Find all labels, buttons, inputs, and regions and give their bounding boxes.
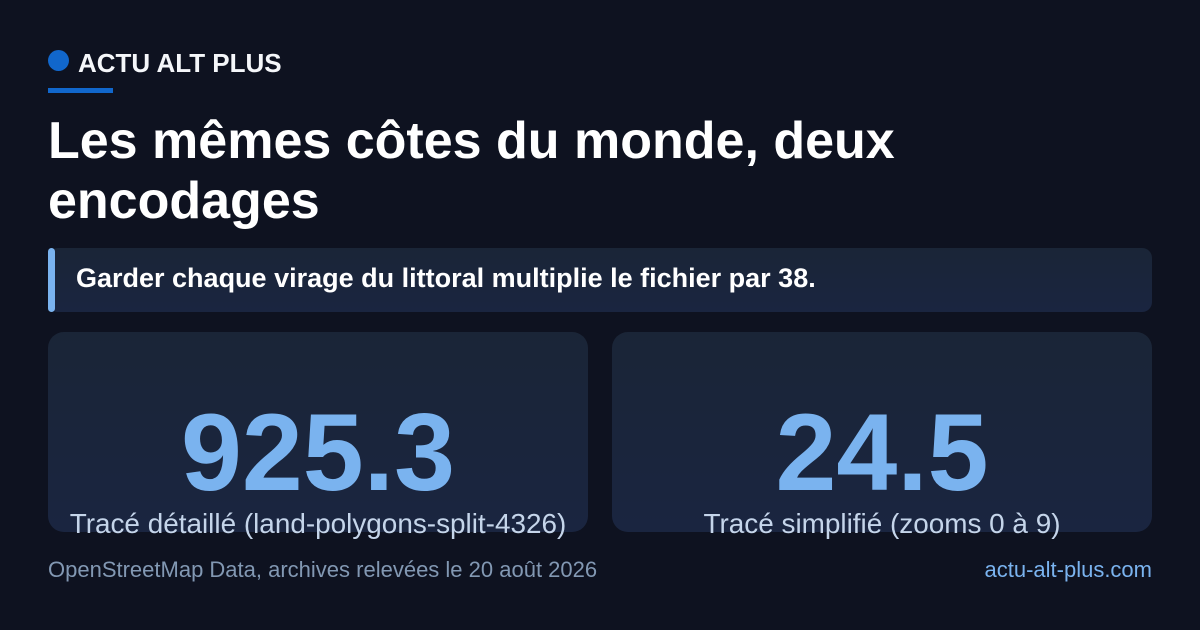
- brand name: ACTU ALT PLUS: [78, 48, 282, 78]
- brand dot: [48, 50, 69, 71]
- title: Les mêmes côtes du monde, deux: [48, 112, 895, 170]
- source note: OpenStreetMap Data, archives relevées le 20 août 2026: [48, 557, 597, 582]
- panel: simplified stat card: [612, 332, 1152, 532]
- callout accent bar: [48, 248, 55, 312]
- title: [48, 112, 895, 230]
- stat label: detailed: Tracé détaillé (land-polygons-split-4326): [70, 508, 566, 539]
- title: encodages: [48, 172, 320, 230]
- site link: actu-alt-plus.com: [984, 557, 1152, 582]
- brand underline: [48, 88, 113, 93]
- stat: simplified value: 24.5: [775, 392, 989, 514]
- callout text: Garder chaque virage du littoral multiplie le fichier par 38.: [76, 263, 816, 293]
- stat: detailed value: 925.3: [181, 392, 455, 514]
- panel: detailed stat card: [48, 332, 588, 532]
- callout: [48, 248, 1152, 312]
- stat label: simplified: Tracé simplifié (zooms 0 à 9): [704, 508, 1060, 539]
